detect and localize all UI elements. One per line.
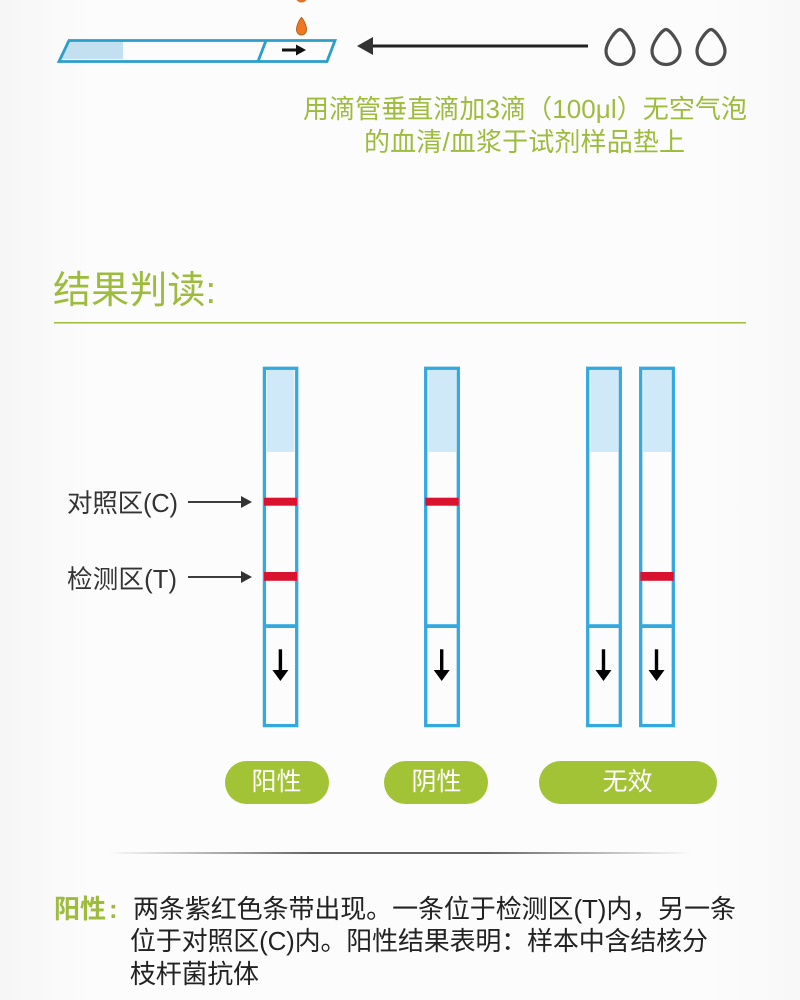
icon: falling orange drops	[296, 0, 306, 35]
divider	[108, 852, 692, 854]
heading: result reading: 结果判读:	[53, 270, 216, 312]
label: test zone	[67, 566, 252, 594]
instruction text: 用滴管垂直滴加3滴（100μl）无空气泡	[303, 94, 747, 124]
strip: negative	[425, 368, 459, 726]
strip: positive	[264, 368, 297, 726]
strip: invalid, test line only	[640, 368, 674, 726]
strip: invalid, no lines	[588, 368, 620, 726]
explanation: positive result: 枝杆菌抗体	[130, 959, 259, 989]
label: test zone: 检测区(T)	[67, 566, 177, 594]
icon: three hollow drops	[606, 30, 725, 64]
instruction text	[303, 94, 747, 157]
pill: positive	[225, 761, 329, 804]
label: control zone	[67, 490, 252, 518]
instruction text: 的血清/血浆于试剂样品垫上	[364, 127, 685, 157]
label: control zone: 对照区(C)	[67, 490, 178, 518]
pill: invalid	[539, 761, 717, 804]
explanation: positive result	[54, 894, 736, 989]
test strip, horizontal	[59, 40, 335, 62]
explanation: positive result: 位于对照区(C)内。阳性结果表明：样本中含结核分	[130, 926, 708, 956]
heading underline	[54, 322, 746, 324]
pill: negative	[384, 761, 488, 804]
pill: invalid: 无效	[602, 768, 653, 796]
explanation: positive result: 两条紫红色条带出现。一条位于检测区(T)内，另一条	[133, 894, 736, 924]
explanation: positive result: 阳性:	[54, 894, 118, 924]
pill: negative: 阴性	[411, 768, 462, 796]
arrow: pointing to strip	[357, 37, 588, 55]
pill: positive: 阳性	[251, 768, 302, 796]
